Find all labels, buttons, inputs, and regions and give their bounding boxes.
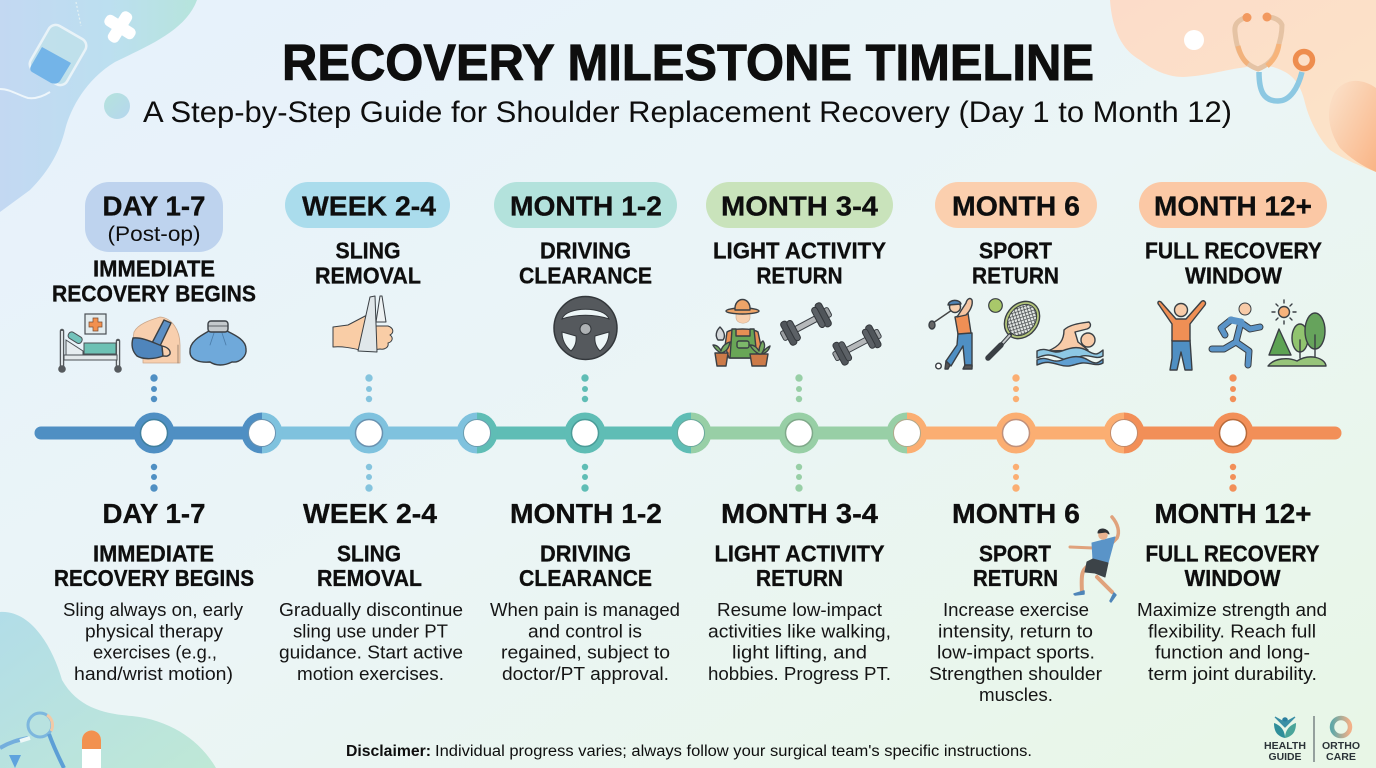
description: guidance. Start active — [279, 642, 463, 662]
heading: LIGHT ACTIVITY — [714, 540, 884, 566]
description: motion exercises. — [297, 663, 444, 684]
heading — [54, 540, 254, 591]
logo: Health Guide — [1264, 717, 1306, 763]
icon: stethoscope — [1235, 12, 1312, 101]
subtitle: A Step-by-Step Guide for Shoulder Replacement Recovery (Day 1 to Month 12) — [143, 96, 1232, 129]
heading: RECOVERY BEGINS — [54, 565, 254, 591]
heading: sport return: SPORT — [979, 238, 1052, 264]
date label: DAY 1-7 — [102, 498, 206, 529]
description: hand/wrist motion) — [74, 663, 233, 684]
heading: RETURN — [756, 565, 843, 591]
pill: Month 12+ — [1139, 182, 1327, 228]
heading: immediate recovery begins: IMMEDIATE — [93, 256, 215, 282]
pill: Day 1-7: DAY 1-7 — [102, 190, 206, 222]
heading: driving clearance: DRIVING — [540, 238, 631, 264]
heading: RETURN — [973, 565, 1058, 591]
milestone header: Month 1-2 — [494, 182, 677, 360]
description — [1137, 599, 1327, 684]
heading: full recovery window: WINDOW — [1185, 262, 1282, 288]
description: flexibility. Reach full — [1148, 620, 1316, 642]
heading: FULL RECOVERY — [1146, 540, 1320, 566]
description: doctor/PT approval. — [502, 663, 669, 684]
description: Sling always on, early — [63, 599, 244, 620]
timeline milestone nodes — [134, 412, 1254, 454]
disclaimer: Individual progress varies; always follow your surgical team's specific instructions. — [435, 743, 1032, 760]
heading: driving clearance — [519, 238, 652, 288]
description — [490, 599, 680, 684]
description: activities like walking, — [708, 620, 891, 642]
description — [279, 599, 463, 684]
icon: IV bag — [0, 2, 89, 98]
detail panel: Day 1-7 — [54, 498, 254, 684]
heading: SPORT — [979, 540, 1051, 566]
description: When pain is managed — [490, 599, 680, 620]
description: sling use under PT — [293, 620, 448, 642]
heading — [973, 540, 1058, 591]
pill: Month 6 — [935, 182, 1097, 228]
heading: REMOVAL — [317, 565, 422, 591]
detail panel: Month 12+ — [1137, 498, 1327, 684]
icon: athlete figure — [1070, 517, 1118, 602]
description: and control is — [528, 620, 642, 642]
icon: hospital bed — [58, 314, 122, 373]
description — [708, 599, 891, 684]
heading: sling removal: SLING — [336, 238, 400, 264]
detail panel: Month 1-2 — [490, 498, 680, 684]
subtitle bullet — [104, 93, 130, 119]
milestone header: Week 2-4 — [285, 182, 450, 352]
description — [929, 599, 1102, 705]
description: muscles. — [979, 684, 1053, 705]
detail panel: Month 3-4 — [708, 498, 891, 684]
icon: dumbbell small — [829, 322, 885, 368]
date label: MONTH 1-2 — [510, 498, 662, 529]
icon: hand removing sling — [333, 296, 393, 352]
description: term joint durability. — [1148, 663, 1317, 684]
pill: Month 1-2: MONTH 1-2 — [510, 190, 662, 222]
pill: Month 12+: MONTH 12+ — [1154, 190, 1312, 222]
description: light lifting, and — [732, 642, 867, 662]
heading — [714, 540, 884, 591]
decorative blob: top left — [0, 0, 197, 212]
icon: arm sling — [132, 317, 180, 363]
heading — [317, 540, 422, 591]
pill: Week 2-4: WEEK 2-4 — [302, 190, 436, 222]
pill: Week 2-4 — [285, 182, 450, 228]
description: exercises (e.g., — [93, 642, 217, 662]
heading: full recovery window: FULL RECOVERY — [1145, 238, 1322, 264]
timeline junction nodes — [241, 412, 1144, 454]
timeline track — [41, 426, 1335, 440]
heading: IMMEDIATE — [93, 540, 214, 566]
heading: light activity return — [713, 238, 886, 288]
description: intensity, return to — [938, 620, 1093, 642]
date label: MONTH 6 — [952, 498, 1080, 529]
heading: full recovery window — [1145, 238, 1322, 288]
pill: Day 1-7: (Post-op) — [108, 223, 200, 246]
logo: Health Guide: HEALTH — [1264, 741, 1306, 752]
heading: DRIVING — [540, 540, 631, 566]
dotted connectors — [150, 374, 1237, 492]
description — [63, 599, 244, 684]
description: Gradually discontinue — [279, 599, 463, 620]
description: function and long- — [1155, 642, 1310, 662]
milestone header: Day 1-7 — [52, 182, 256, 373]
description: Increase exercise — [943, 599, 1089, 620]
date label: MONTH 12+ — [1154, 498, 1312, 529]
icon: swimmer — [1037, 322, 1103, 366]
icon: bottom-left stethoscope — [0, 713, 64, 768]
description: Maximize strength and — [1137, 599, 1327, 620]
disclaimer: Disclaimer: — [346, 743, 431, 760]
icon: ice pack — [190, 321, 246, 365]
pill: Month 3-4: MONTH 3-4 — [721, 190, 878, 222]
icon: person arms raised — [1158, 301, 1206, 370]
decorative blob: right corner — [1329, 81, 1376, 172]
icon: gardener — [713, 300, 770, 366]
description: low-impact sports. — [937, 642, 1095, 662]
icon: steering wheel — [554, 296, 617, 360]
heading: sling removal: REMOVAL — [315, 262, 421, 288]
heading: WINDOW — [1184, 565, 1281, 591]
heading: light activity return: LIGHT ACTIVITY — [713, 238, 886, 264]
description: physical therapy — [85, 620, 224, 642]
heading: SLING — [337, 540, 401, 566]
decorative blob: bottom left — [0, 612, 216, 768]
description: regained, subject to — [501, 642, 670, 662]
icon: white medical cross — [97, 4, 143, 50]
milestone header: Month 12+ — [1139, 182, 1327, 370]
heading: sport return: RETURN — [972, 262, 1059, 288]
heading: immediate recovery begins — [52, 256, 256, 306]
logo: Ortho Care — [1322, 718, 1360, 763]
heading: sport return — [972, 238, 1059, 288]
icon: sun and trees — [1268, 300, 1326, 366]
icon: golfer — [929, 299, 972, 369]
description: hobbies. Progress PT. — [708, 663, 891, 684]
logo divider — [1313, 716, 1315, 762]
milestone header: Month 3-4 — [706, 182, 893, 368]
heading: driving clearance: CLEARANCE — [519, 262, 652, 288]
decorative blob: top right — [1110, 0, 1376, 172]
pill: Day 1-7 — [85, 182, 223, 252]
icon: tennis racket and ball — [988, 294, 1047, 358]
description: Resume low-impact — [717, 599, 882, 620]
date label: MONTH 3-4 — [721, 498, 878, 529]
pill: Month 1-2 — [494, 182, 677, 228]
logo: Ortho Care: CARE — [1326, 752, 1356, 763]
heading: sling removal — [315, 238, 421, 288]
detail panel: Month 6 — [929, 498, 1118, 705]
date label: WEEK 2-4 — [303, 498, 437, 529]
milestone header: Month 6 — [929, 182, 1103, 369]
icon: pill capsule — [82, 730, 101, 768]
icon: white dot — [1184, 30, 1204, 50]
heading: CLEARANCE — [519, 565, 652, 591]
pill: Month 6: MONTH 6 — [952, 190, 1080, 222]
heading: light activity return: RETURN — [756, 262, 842, 288]
heading: immediate recovery begins: RECOVERY BEGINS — [52, 280, 256, 306]
heading — [1146, 540, 1320, 591]
pill: Month 3-4 — [706, 182, 893, 228]
detail panel: Week 2-4 — [279, 498, 463, 684]
logo: Ortho Care: ORTHO — [1322, 741, 1360, 752]
title: RECOVERY MILESTONE TIMELINE — [282, 34, 1094, 91]
logo: Health Guide: GUIDE — [1268, 752, 1302, 763]
heading — [519, 540, 652, 591]
description: Strengthen shoulder — [929, 663, 1102, 684]
icon: runner — [1212, 303, 1260, 365]
icon: dumbbell — [776, 300, 836, 348]
